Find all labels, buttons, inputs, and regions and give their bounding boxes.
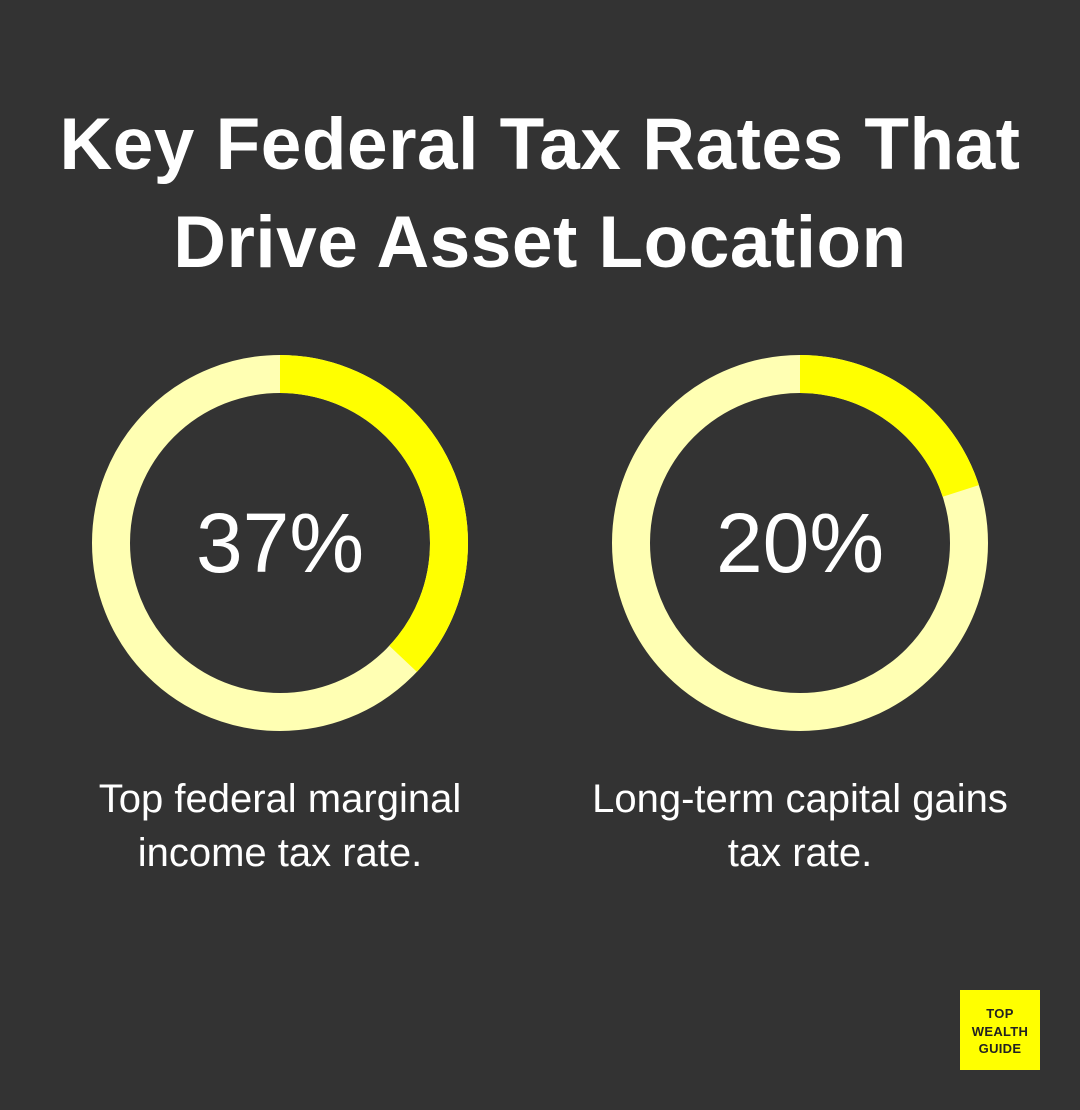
- title: [59, 104, 1020, 283]
- number: 20%: 20%: [716, 496, 884, 590]
- label right: tax rate.: [728, 831, 872, 875]
- donut left: [111, 374, 449, 712]
- label right: Long-term capital gains: [592, 777, 1008, 821]
- label left: Top federal marginal: [99, 777, 461, 821]
- label left: income tax rate.: [138, 831, 422, 875]
- donut right: [631, 374, 969, 712]
- logo: [960, 990, 1040, 1070]
- number: 37%: 37%: [196, 496, 364, 590]
- logo: WEALTH: [972, 1024, 1028, 1038]
- title: Key Federal Tax Rates That: [59, 104, 1020, 185]
- logo: TOP: [986, 1006, 1014, 1021]
- title: Drive Asset Location: [173, 202, 907, 283]
- logo: GUIDE: [979, 1041, 1021, 1056]
- label left: [99, 777, 461, 875]
- label right: [592, 777, 1008, 875]
